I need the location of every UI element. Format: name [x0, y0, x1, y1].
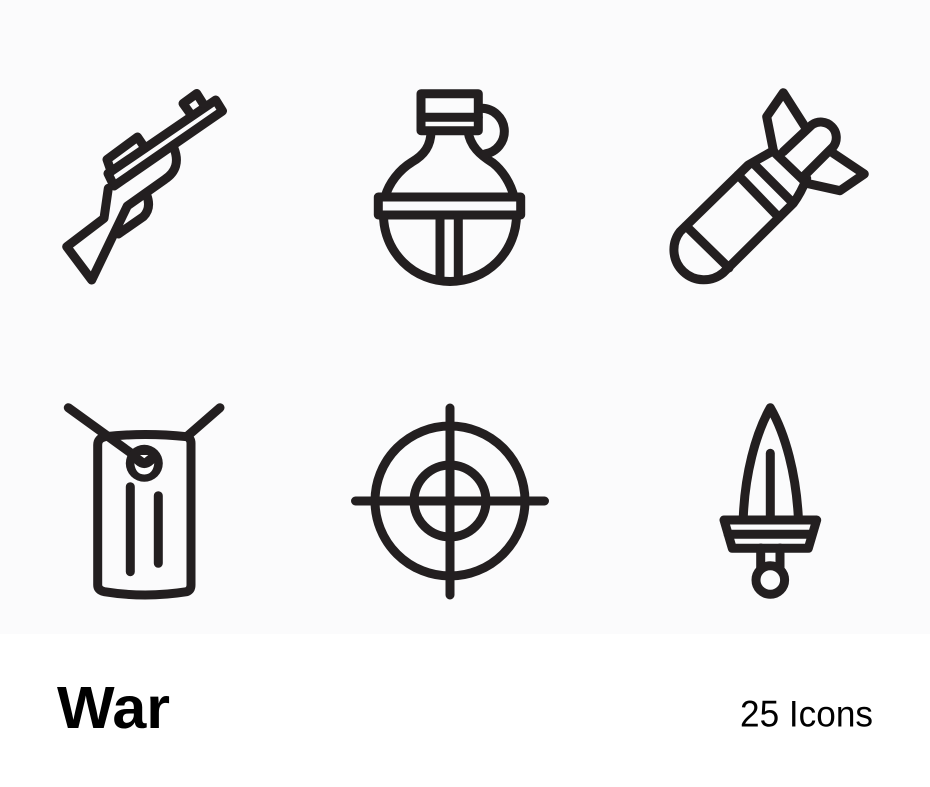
icon: dagger	[724, 408, 817, 594]
icon: dog tag	[68, 408, 220, 595]
icon count: 25 Icons	[740, 694, 873, 734]
title: War	[57, 675, 170, 741]
icon: rifle	[67, 94, 222, 280]
icon: crosshair target	[356, 408, 544, 595]
icon: canteen	[378, 94, 521, 282]
icon: bomb	[674, 93, 864, 280]
